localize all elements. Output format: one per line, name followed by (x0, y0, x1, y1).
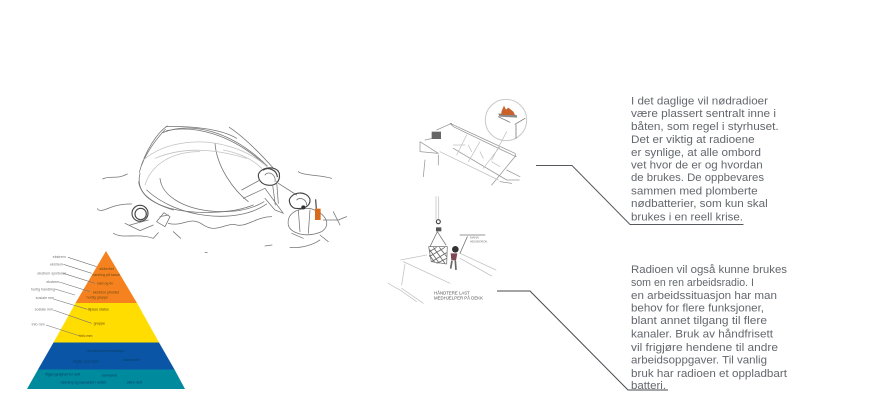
inner labels: hurtig gruppe (87, 295, 108, 299)
sketch: people in water by capsized boat (97, 126, 347, 253)
crane hook and sling (430, 197, 446, 247)
handwritten callout (460, 235, 487, 253)
sketch: crane lift on deck (388, 197, 496, 303)
inner labels: tilpass status (88, 307, 109, 311)
crate net (429, 247, 447, 264)
person in water, left (125, 205, 170, 231)
capsized hull (139, 126, 273, 216)
inner labels (45, 267, 142, 384)
inner labels: nød og liv (97, 282, 113, 286)
leader lines (46, 257, 97, 336)
outer labels: ekstrem (46, 280, 59, 284)
handwritten caption (434, 290, 483, 301)
inner labels: sikkerhet (99, 267, 114, 271)
text block: work radio: Radioen vil også kunne brukes (631, 264, 787, 276)
inner labels: ekstrem prioritet (93, 291, 119, 295)
text block: daily use: de brukes. De oppbevares (631, 172, 764, 184)
outer labels: sosiale mm (35, 307, 53, 311)
inner labels: tilgjengelighet for nett (45, 373, 80, 377)
inner labels: varsling på kanal (92, 273, 120, 277)
deck (388, 253, 496, 303)
text block: daily use: Det er viktig at radioene (631, 134, 755, 146)
outer labels: sosiale mm (36, 296, 54, 300)
leader line: top text (536, 166, 744, 224)
inner labels: info mm (79, 334, 92, 338)
water waves (97, 172, 332, 253)
inner labels: arbeidskommunikasjon (87, 349, 125, 353)
text block: daily use: båten, som regel i styrhuset. (631, 121, 779, 133)
text block: work radio: en arbeidssituasjon har man (631, 290, 777, 302)
text block: work radio: kanaler. Bruk av håndfrisett (631, 328, 774, 340)
wheelhouse outline (420, 123, 520, 185)
detail circle (485, 99, 527, 141)
outer labels: info mm (32, 323, 45, 327)
leader line: bottom text (497, 291, 668, 390)
handwritten callout: MANN (470, 236, 479, 240)
outer labels (31, 255, 67, 327)
text block: daily use: være plassert sentralt inne i (631, 108, 776, 120)
radio on roof (432, 132, 441, 139)
inner labels: gruppe (94, 322, 105, 326)
pyramid labels and leaders (31, 255, 142, 384)
inner labels: samarbeid (123, 358, 140, 362)
person holding the hull (242, 168, 297, 213)
text block: work radio (631, 264, 788, 392)
outer labels: hurtig handling (31, 287, 55, 291)
text block: work radio: som en ren arbeidsradio. I (631, 277, 754, 289)
text block: work radio: batteri. (631, 380, 666, 392)
inner labels: sikre nett (127, 380, 142, 384)
handwritten caption: MEDHJELPER PÅ DEKK (434, 296, 483, 301)
text block: daily use: nødbatterier, som kun skal (631, 198, 768, 210)
icon: radios in rack (498, 106, 525, 138)
outer labels: ekstrem symboler (37, 272, 67, 276)
text block: work radio: behov for flere funksjoner, (631, 302, 764, 314)
sketch: wheelhouse with radio in detail circle (420, 99, 527, 185)
text block: daily use: I det daglige vil nødradioer (631, 96, 768, 108)
worker (451, 246, 459, 270)
text block: daily use: vet hvor de er og hvordan (631, 160, 763, 172)
text block: daily use: er synlige, at alle ombord (631, 147, 761, 159)
text block: work radio: bruk har radioen et oppladbart (631, 368, 788, 380)
pyramid tier: blue (38, 342, 174, 370)
pyramid chart (27, 251, 185, 389)
text block: daily use (631, 96, 779, 224)
pyramid tier: yellow (54, 303, 159, 342)
inner labels: samband (102, 374, 117, 378)
person with radio (288, 193, 347, 242)
inner labels: daglig operasjon (73, 360, 99, 364)
text block: work radio: vil frigjøre hendene til andre (631, 342, 778, 354)
text block: work radio: arbeidsoppgaver. Til vanlig (631, 354, 767, 366)
pyramid tier: orange (76, 251, 137, 303)
handwritten caption: HÅNDTERE LAST (434, 290, 470, 295)
handwritten callout: HEISEKROK (470, 240, 487, 244)
outer labels: ekstrem (53, 255, 66, 259)
text block: work radio: blant annet tilgang til flere (631, 315, 767, 327)
inner labels: dekning og kapasitet i nettet (61, 380, 106, 384)
outer labels: ekstrem (50, 263, 63, 267)
pyramid tier: teal (27, 370, 185, 389)
text block: daily use: brukes i en reell krise. (631, 212, 743, 224)
text block: daily use: sammen med plomberte (631, 186, 758, 198)
icon: orange radio (315, 199, 321, 220)
